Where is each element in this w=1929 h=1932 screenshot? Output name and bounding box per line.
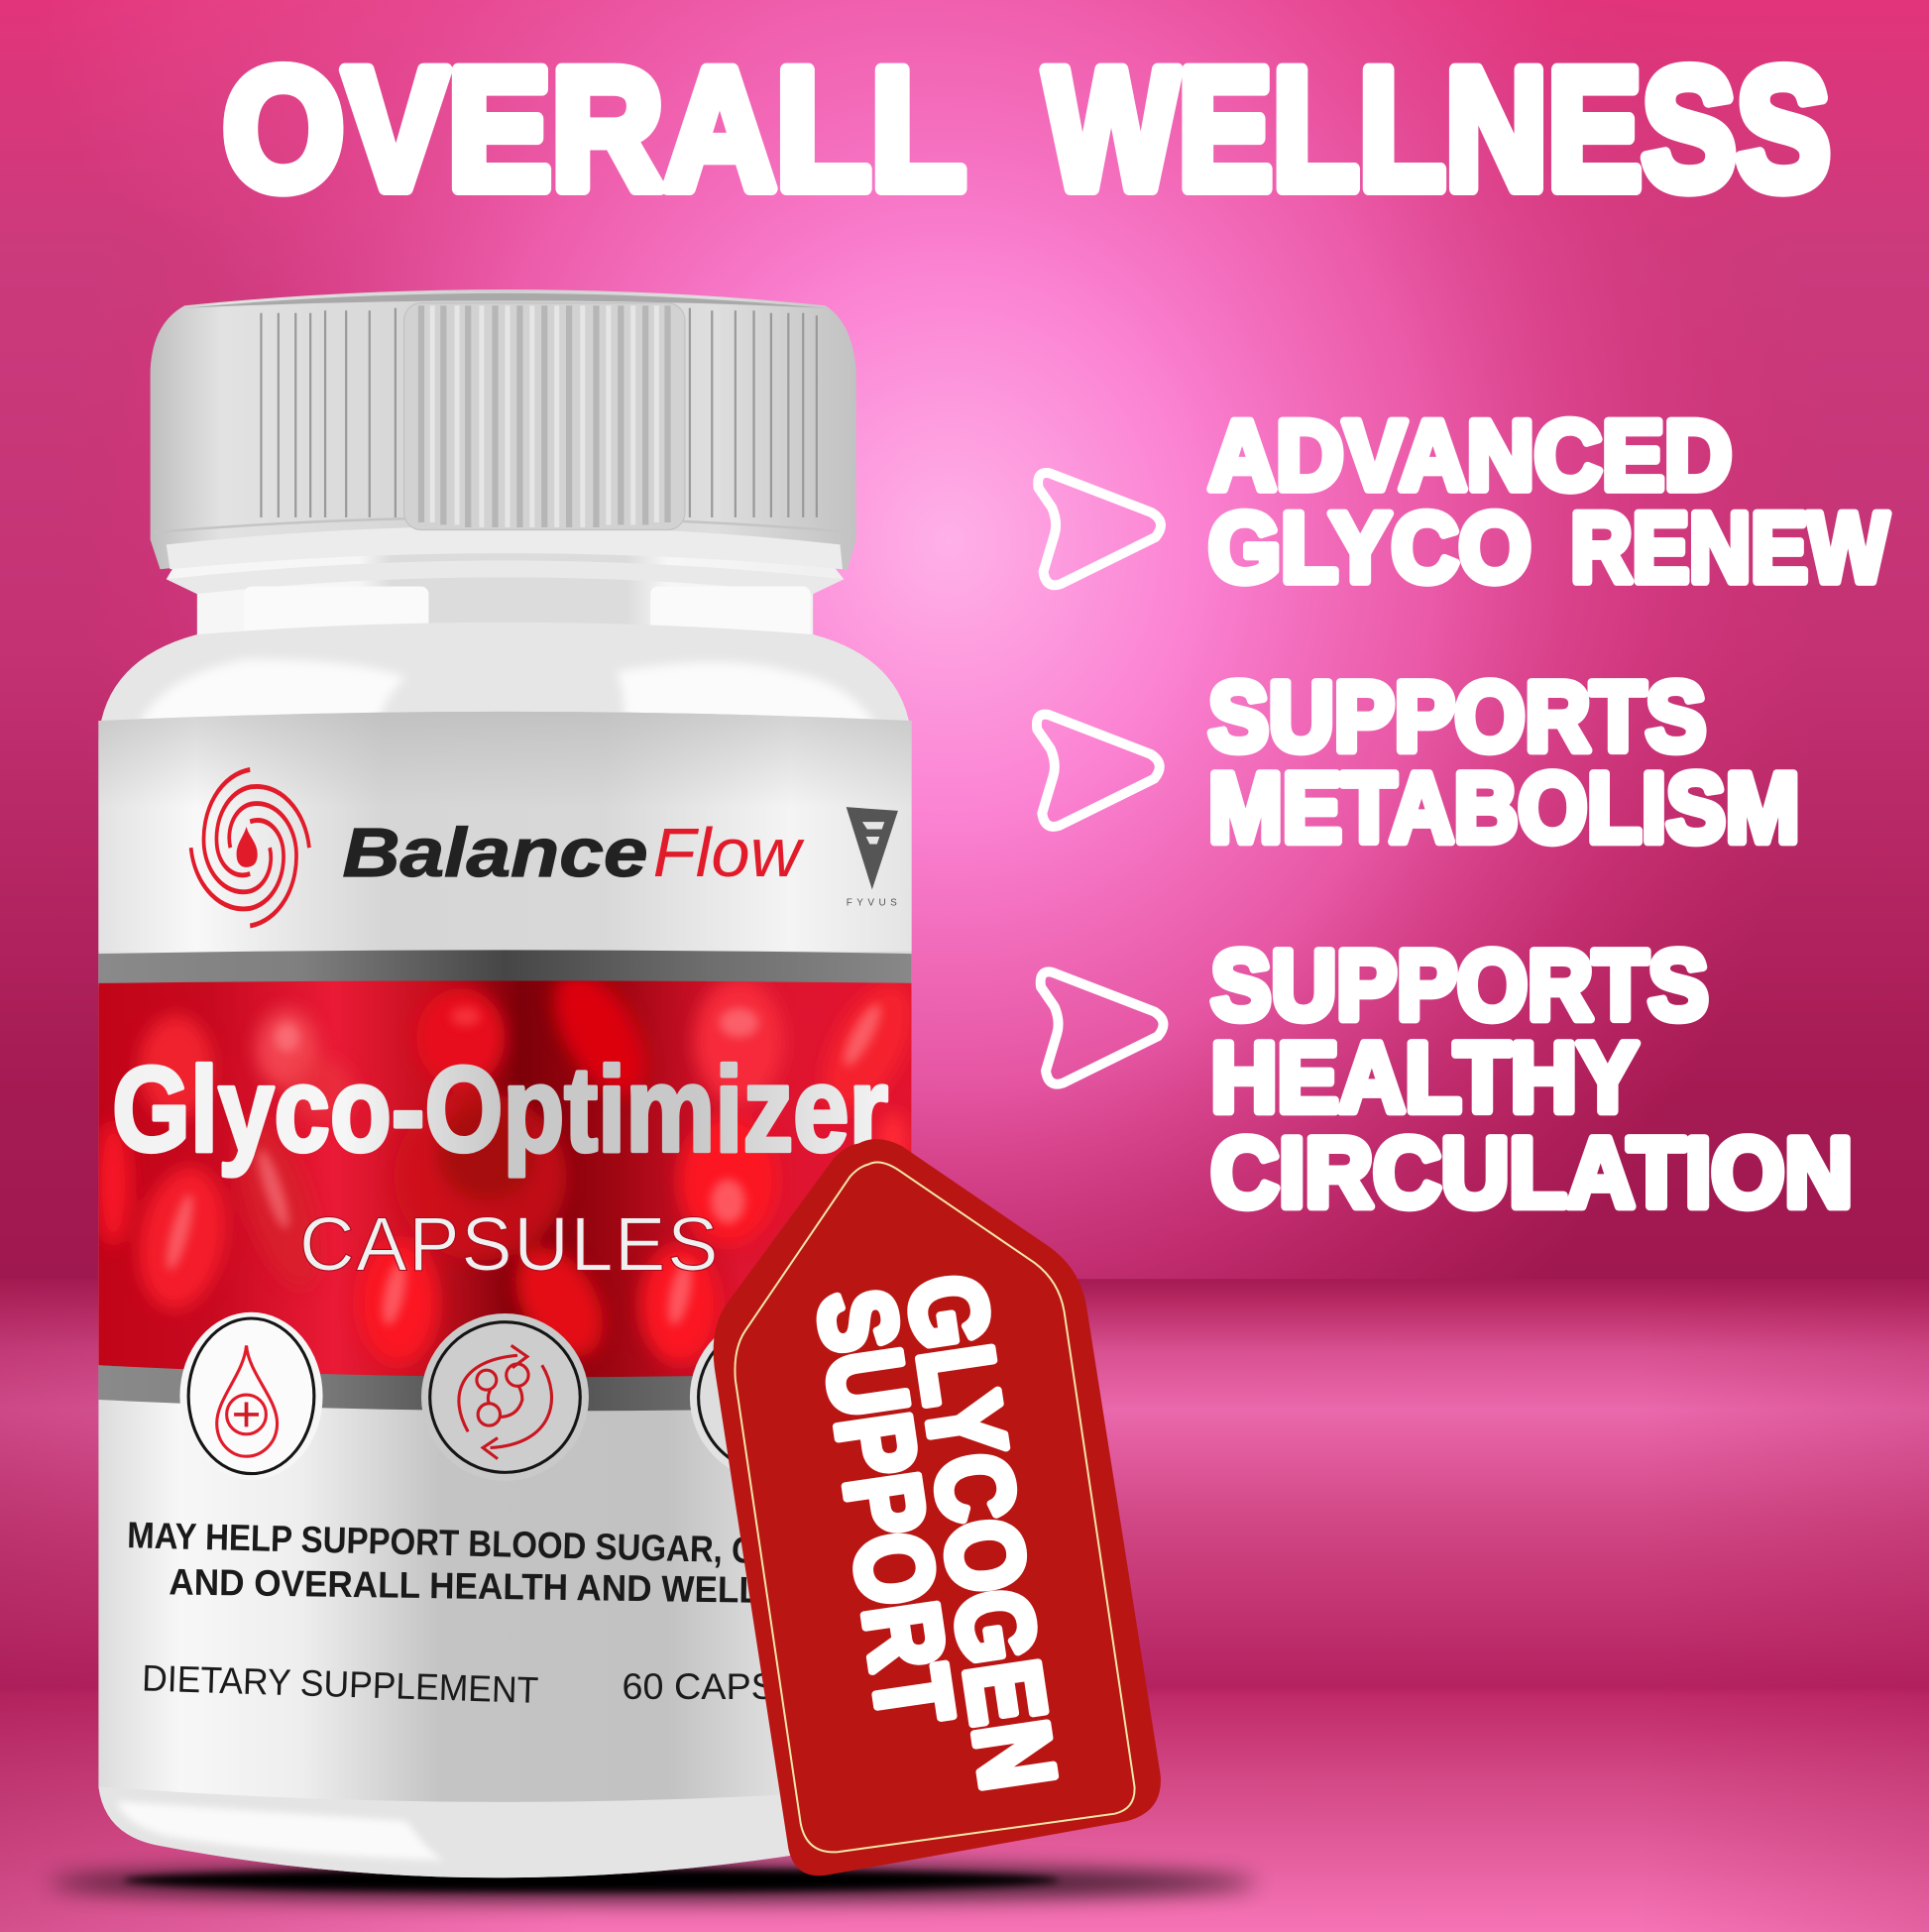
- label body: [98, 712, 912, 1877]
- claim text: [127, 1514, 760, 1611]
- background: pink floor: [0, 1279, 1929, 1932]
- bottle base highlights: [98, 1786, 912, 1877]
- cap center grip panel: [404, 303, 685, 529]
- arrow icon 2: [1037, 715, 1160, 827]
- arrow icon 1: [1038, 473, 1161, 585]
- title: [223, 32, 1831, 225]
- blood cells: [96, 958, 931, 1372]
- benefit: advanced glyco renew: ADVANCED: [1208, 400, 1732, 511]
- product name: Glyco-Optimizer: [112, 1042, 888, 1177]
- blood cell highlights: [162, 1000, 887, 1327]
- bottle cap: [151, 289, 856, 569]
- red label panel: [99, 980, 912, 1378]
- hanging tag: [714, 1139, 1161, 1875]
- brand name: Flow: [653, 814, 805, 891]
- upper white label: [98, 712, 912, 952]
- benefit: supports metabolism: SUPPORTS: [1208, 662, 1706, 772]
- benefit: advanced glyco renew: RENEW: [1570, 494, 1888, 604]
- brand name: [342, 814, 805, 891]
- cap ridges: [261, 305, 817, 527]
- bottle neck and shoulder: [98, 548, 912, 985]
- tag text: support: SUPPORT: [795, 1283, 976, 1731]
- tag body: [714, 1139, 1161, 1875]
- capsule count: 60 CAPS: [623, 1665, 776, 1707]
- tag text: glycogen: GLYCOGEN: [885, 1268, 1078, 1797]
- benefit: supports healthy circulation: HEALTHY: [1211, 1023, 1639, 1133]
- bottle: [96, 289, 931, 1877]
- icon badge: circulation: [421, 1313, 589, 1481]
- brand name: Balance: [342, 814, 648, 891]
- capsules label: CAPSULES: [299, 1202, 718, 1288]
- tag stitched outline: [735, 1163, 1135, 1852]
- benefit: supports healthy circulation: [1211, 931, 1853, 1228]
- bottle shadow: [50, 1866, 1257, 1900]
- neck highlights: [98, 561, 912, 739]
- arrow icon 3: [1041, 971, 1163, 1084]
- title: OVERALL: [223, 32, 965, 225]
- icon badge: partially hidden third: [690, 1313, 857, 1481]
- claim text: MAY HELP SUPPORT BLOOD SUGAR, C: [127, 1514, 755, 1571]
- fyvus logo: [847, 807, 901, 909]
- gray band top: [98, 950, 912, 984]
- claim text: AND OVERALL HEALTH AND WELL: [169, 1560, 760, 1611]
- icon badge: blood drop: [179, 1312, 323, 1480]
- brand logo swirl: [191, 769, 309, 926]
- benefit: supports healthy circulation: CIRCULATION: [1211, 1118, 1853, 1228]
- benefit: advanced glyco renew: GLYCO: [1208, 494, 1532, 604]
- dietary supplement text: DIETARY SUPPLEMENT: [142, 1656, 539, 1711]
- benefit: supports metabolism: [1208, 662, 1800, 863]
- fyvus logo: FYVUS: [847, 898, 901, 909]
- benefit: supports healthy circulation: SUPPORTS: [1211, 931, 1709, 1041]
- lower gray band: [98, 1365, 912, 1411]
- benefit: advanced glyco renew: [1208, 400, 1888, 604]
- benefit: supports metabolism: METABOLISM: [1208, 753, 1800, 863]
- background: pink studio wall: [0, 0, 1929, 1288]
